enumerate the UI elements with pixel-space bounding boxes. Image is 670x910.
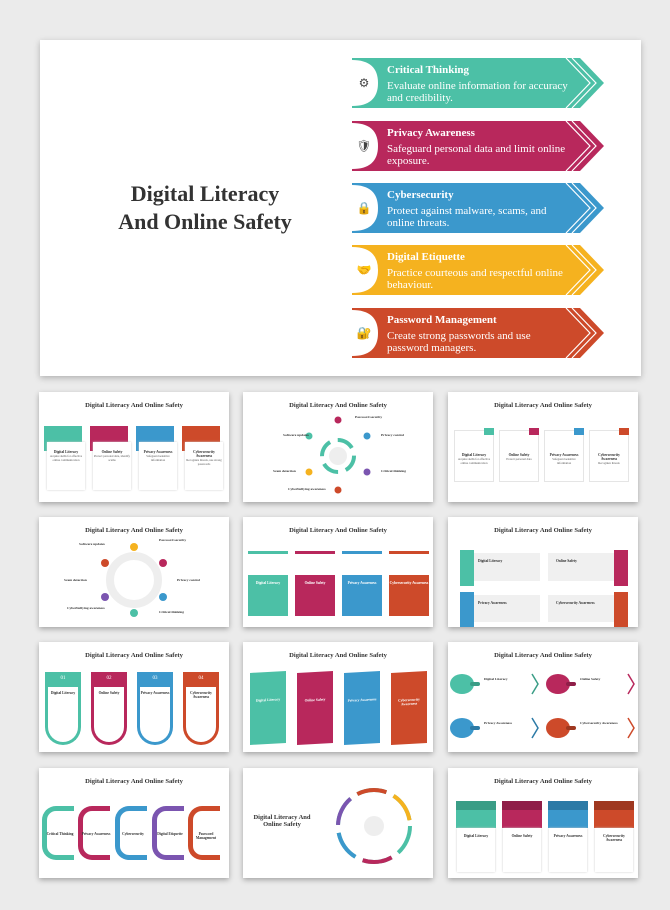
thumbnail 8: slanted cards: Online Safety [305,697,325,703]
title [118,181,292,234]
thumbnail 6: 2x2 gray boxes: Digital Literacy And Online Safety [494,527,592,534]
banner: critical thinking: and credibility. [387,92,453,104]
thumbnail 5: colored cards: Cybersecurity Awareness [390,581,428,585]
thumbnail 3: white cards with tags [448,392,638,502]
banner: cybersecurity: Cybersecurity [387,189,454,201]
thumbnail 12: header cards: Digital Literacy [464,834,488,838]
thumbnail 5: colored cards: Online Safety [305,581,325,585]
thumbnail 4: hexagon cycle: Cyberbullying awareness [67,606,105,610]
thumbnail 1: tab cards: Recognize threats, use strong passwords [186,458,222,466]
thumbnail 7: numbered tabs: Cybersecurity Awareness [190,691,212,699]
thumbnail 6: 2x2 gray boxes [448,517,638,627]
thumbnail 12: header cards: Privacy Awareness [554,834,582,838]
thumbnail 3: white cards with tags: Acquire skills for effective online communication [458,457,490,465]
banner: privacy awareness: exposure. [387,155,430,167]
thumbnail 6: 2x2 gray boxes: Cybersecurity Awareness [556,601,595,605]
thumbnail 7: numbered tabs: 04 [198,676,204,681]
thumbnail 1: tab cards: Protect personal data, identify scams [94,454,130,462]
thumbnail 7: numbered tabs: 02 [106,676,112,681]
banner: critical thinking: Evaluate online information for accuracy [387,80,568,92]
thumbnail 1: tab cards: Safeguard sensitive information [146,454,170,462]
banner: password management: 🔐 [357,326,371,340]
thumbnail 6: 2x2 gray boxes: Digital Literacy [478,559,502,563]
thumbnail 1: tab cards: Digital Literacy And Online Safety [85,402,183,409]
thumbnail 2: cycle: Cyberbullying awareness [288,487,326,491]
thumbnail 7: numbered tabs: Digital Literacy [51,691,75,695]
thumbnail 1: tab cards: Cybersecurity Awareness [193,450,215,458]
thumbnail 4: hexagon cycle: Software updates [79,542,106,546]
thumbnail 9: circles with chevrons: Privacy Awareness [484,721,513,725]
thumbnail 2: cycle: Digital Literacy And Online Safety [289,402,387,409]
banner: privacy awareness: Privacy Awareness [387,127,476,139]
thumbnail 10: U shapes: Cybersecurity [122,832,144,836]
thumbnail 12: header cards [448,768,638,878]
thumbnail 7: numbered tabs: Digital Literacy And Online Safety [85,652,183,659]
banner: critical thinking: Critical Thinking [387,64,470,76]
banner: cybersecurity [352,183,604,233]
thumbnail 5: colored cards: Digital Literacy And Online Safety [289,527,387,534]
thumbnail 10: U shapes: Digital Literacy And Online Safety [85,778,183,785]
thumbnail 1: tab cards: Acquire skills for effective online communication [50,454,82,462]
thumbnail 10: U shapes: Digital Etiquette [157,832,183,836]
thumbnail 8: slanted cards: Digital Literacy [256,697,280,703]
thumbnail 7: numbered tabs: 03 [152,676,158,681]
thumbnail 7: numbered tabs: Online Safety [99,691,119,695]
thumbnail 1: tab cards: Privacy Awareness [144,450,172,454]
title: And Online Safety [118,209,292,234]
thumbnail 3: white cards with tags: Cybersecurity Awareness [598,453,620,461]
thumbnail 12: header cards: Online Safety [512,834,532,838]
thumbnail 2: cycle: Scam detection [273,469,296,473]
thumbnail 9: circles with chevrons: Digital Literacy [484,677,508,681]
banner: privacy awareness [352,121,604,171]
thumbnail 11: ring [243,768,433,878]
thumbnail 7: numbered tabs: Privacy Awareness [141,691,169,695]
banner: digital etiquette [352,245,604,295]
thumbnail 3: white cards with tags: Recognize threats [598,461,620,465]
thumbnail 9: circles with chevrons: Cybersecurity Awareness [580,721,618,725]
thumbnail 2: cycle: Password security [355,415,382,419]
thumbnail 3: white cards with tags: Protect personal data [506,457,532,461]
thumbnail 12: header cards: Cybersecurity Awareness [603,834,625,842]
title: Digital Literacy [131,181,279,206]
banner: privacy awareness: Safeguard personal data and limit online [387,143,565,155]
banner: password management: password managers. [387,342,476,354]
thumbnail 7: numbered tabs: 01 [60,676,66,681]
thumbnail 5: colored cards [243,517,433,627]
thumbnail 3: white cards with tags: Privacy Awareness [550,453,578,457]
thumbnail 3: white cards with tags: Safeguard sensitive information [552,457,576,465]
thumbnail 8: slanted cards: Cybersecurity Awareness [398,697,420,706]
banner: digital etiquette: Practice courteous and respectful online [387,267,563,279]
banner: cybersecurity: online threats. [387,217,450,229]
banner: password management: Create strong passwords and use [387,330,531,342]
thumbnail 4: hexagon cycle [39,517,229,627]
main slide [40,40,641,376]
thumbnail 9: circles with chevrons: Digital Literacy And Online Safety [494,652,592,659]
thumbnail 6: 2x2 gray boxes: Privacy Awareness [478,601,507,605]
banner: password management: Password Management [387,314,497,326]
thumbnail 6: 2x2 gray boxes: Online Safety [556,559,577,563]
thumbnail 3: white cards with tags: Digital Literacy [462,453,486,457]
thumbnail 2: cycle: Critical thinking [381,469,406,473]
banner: critical thinking: ⚙ [359,76,369,90]
thumbnail 9: circles with chevrons: Online Safety [580,677,601,681]
thumbnail 4: hexagon cycle: Digital Literacy And Online Safety [85,527,183,534]
thumbnail 2: cycle: Software updates [283,433,310,437]
thumbnail 4: hexagon cycle: Privacy control [177,578,200,582]
thumbnail 10: U shapes: Privacy Awareness [82,832,110,836]
thumbnail 5: colored cards: Privacy Awareness [348,581,376,585]
thumbnail 2: cycle: Privacy control [381,433,404,437]
thumbnail 8: slanted cards: Privacy Awareness [348,697,376,703]
banner: password management [352,308,604,358]
thumbnail 8: slanted cards [243,642,433,752]
thumbnail 3: white cards with tags: Online Safety [509,453,529,457]
thumbnail 12: header cards: Digital Literacy And Online Safety [494,778,592,785]
banner: critical thinking [352,58,604,108]
banner: privacy awareness: 🛡 [356,139,372,153]
thumbnail 7: numbered tabs [39,642,229,752]
thumbnail 1: tab cards: Digital Literacy [54,450,78,454]
thumbnail 8: slanted cards: Digital Literacy And Online Safety [289,652,387,659]
thumbnail 4: hexagon cycle: Password security [159,538,186,542]
thumbnail 10: U shapes [39,768,229,878]
banner: digital etiquette: behaviour. [387,279,433,291]
thumbnail 3: white cards with tags: Digital Literacy And Online Safety [494,402,592,409]
thumbnail 10: U shapes: Password Management [196,832,216,840]
thumbnail 2: cycle [243,392,433,502]
banner: digital etiquette: Digital Etiquette [387,251,465,263]
thumbnail 4: hexagon cycle: Critical thinking [159,610,184,614]
thumbnail 1: tab cards: Online Safety [102,450,122,454]
banner: cybersecurity: 🔒 [357,201,371,215]
thumbnail 11: ring: Digital Literacy And Online Safety [253,814,311,828]
banner: digital etiquette: 🤝 [357,263,372,277]
thumbnail 5: colored cards: Digital Literacy [256,581,280,585]
banners [352,58,604,358]
thumbnail 10: U shapes: Critical Thinking [47,832,73,836]
thumbnail 1: tab cards [39,392,229,502]
banner: cybersecurity: Protect against malware, scams, and [387,205,547,217]
thumbnail 4: hexagon cycle: Scam detection [64,578,87,582]
thumbnail 9: circles with chevrons [448,642,638,752]
